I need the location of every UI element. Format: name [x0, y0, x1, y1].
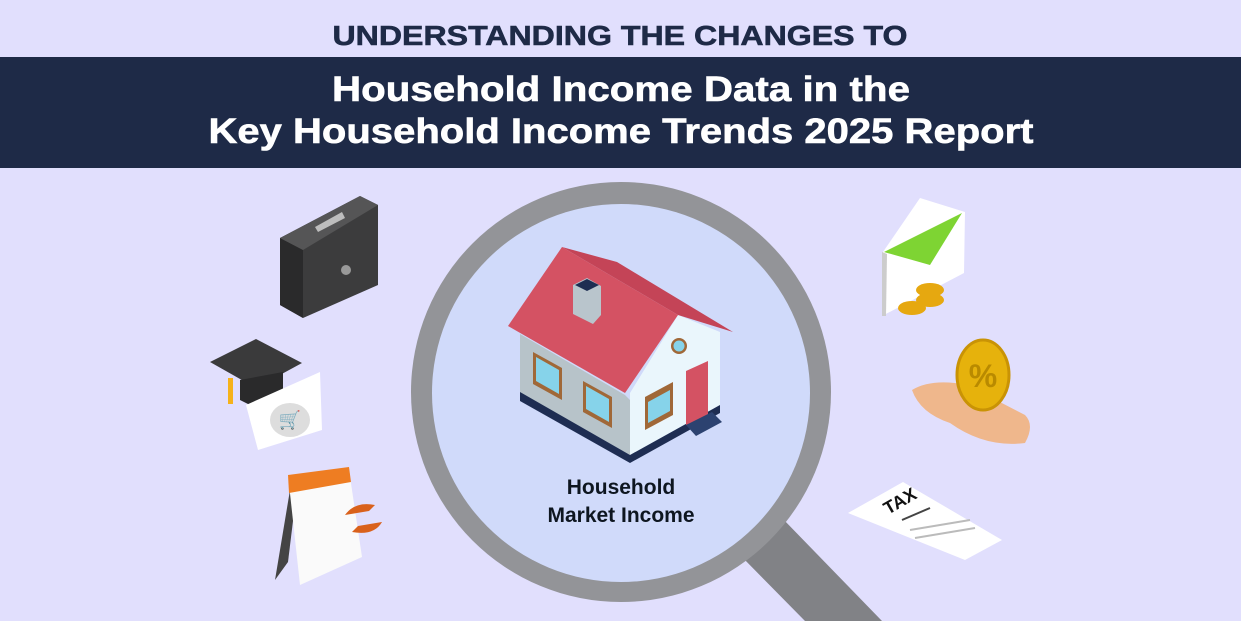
- icon: briefcase: [280, 196, 378, 318]
- title: Household Income Data in the: [332, 70, 910, 109]
- magnifier handle: [740, 518, 882, 621]
- icon: calendar with arrows: [275, 467, 382, 585]
- label: household market income: Market Income: [547, 504, 695, 527]
- icon: graduation cap and voucher: 🛒: [279, 409, 301, 430]
- title: [208, 70, 1034, 151]
- label: household market income: [547, 476, 695, 527]
- label: household market income: Household: [567, 476, 675, 499]
- subtitle: UNDERSTANDING THE CHANGES TO: [332, 20, 908, 51]
- icon: tax document: [848, 482, 1002, 560]
- title band: [0, 57, 1241, 168]
- icon: tax document: TAX: [880, 484, 920, 518]
- icon: house: [508, 247, 733, 463]
- icon: envelope with money and coins: [882, 198, 965, 316]
- icon: hand with percent coin: [912, 340, 1030, 444]
- title: Key Household Income Trends 2025 Report: [208, 112, 1034, 151]
- magnifier: [411, 182, 882, 621]
- icon: graduation cap and voucher: [210, 339, 322, 450]
- icon: hand with percent coin: %: [969, 358, 997, 394]
